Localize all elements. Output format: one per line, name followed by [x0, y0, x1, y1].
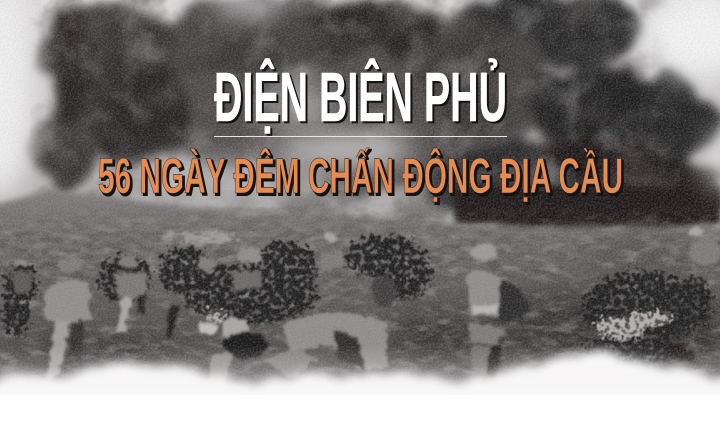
soldier: far right: [689, 228, 703, 236]
soldier: crouching: [282, 312, 388, 370]
divider line under title: [214, 136, 507, 137]
soldier: right with pack: [470, 244, 498, 260]
soldiers running through the field: [1, 228, 720, 388]
soldier: top centre: [325, 234, 337, 242]
background photo: sky and smoke: [0, 0, 720, 234]
title: ĐIỆN BIÊN PHỦ: ĐIỆN BIÊN PHỦ: [214, 57, 507, 136]
dark base of smoke at right: [455, 186, 720, 224]
soldier: mid left: [118, 255, 138, 269]
title: ĐIỆN BIÊN PHỦ: [214, 57, 509, 138]
light leaves on camouflage: [205, 312, 670, 342]
soldier: camouflaged, bottom right: [665, 340, 695, 362]
smoke clouds: [32, 0, 720, 234]
foliage camouflage bushes: [1, 236, 712, 368]
soldier: centre with helmet: [237, 247, 263, 263]
white fog along the bottom edge: [0, 345, 720, 421]
field texture under the soldiers: [0, 206, 720, 378]
soldier: with dark legs: [166, 305, 180, 338]
bright sky edges: [0, 0, 34, 200]
background photo: hillside field: [0, 190, 720, 405]
soldier: large front left: [58, 257, 82, 273]
soldier: far left: [17, 258, 29, 266]
bright gap in smoke behind title: [275, 132, 415, 168]
